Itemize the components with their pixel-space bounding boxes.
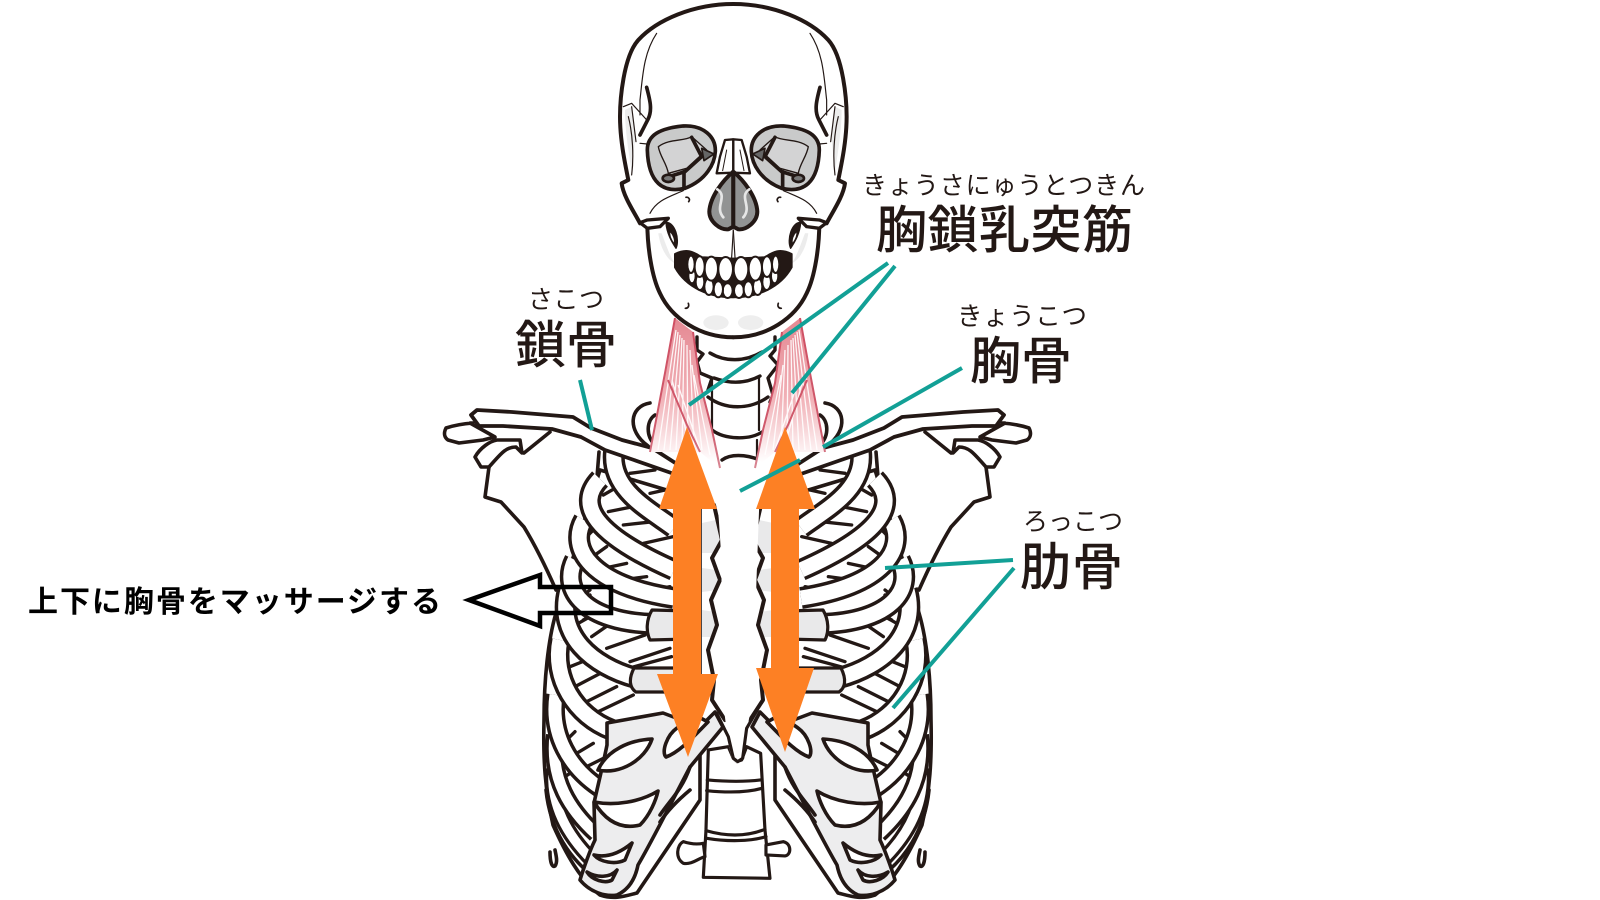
- label: sternocleidomastoid: [862, 172, 1145, 259]
- label: clavicle: [515, 286, 617, 374]
- label: sternum: 胸骨: [970, 333, 1072, 390]
- label: ribs: [1020, 508, 1123, 596]
- label: sternum: きょうこつ: [957, 303, 1087, 331]
- leader: clavicle: [580, 380, 592, 430]
- leader: ribs: [885, 560, 1014, 708]
- label: ribs: ろっこつ: [1023, 508, 1123, 536]
- torso skeleton: [445, 403, 1030, 897]
- orange double arrow: right: [756, 427, 815, 752]
- leader: sternum: [740, 368, 962, 491]
- label: sternocleidomastoid: 胸鎖乳突筋: [876, 202, 1133, 259]
- lower vertebrae: [678, 710, 790, 878]
- label: sternocleidomastoid: きょうさにゅうとつきん: [862, 172, 1145, 200]
- leader: sternocleidomastoid: [689, 263, 895, 405]
- callout arrow: [469, 575, 611, 626]
- skeleton figure: [445, 4, 1030, 897]
- orange double arrow: left: [657, 427, 718, 757]
- callout text: 上下に胸骨をマッサージする: [28, 586, 441, 619]
- label: sternum: [957, 303, 1087, 390]
- label: clavicle: さこつ: [528, 286, 604, 314]
- label: clavicle: 鎖骨: [515, 317, 617, 374]
- sternum: [716, 470, 760, 760]
- sternocleidomastoid muscles: [650, 318, 825, 468]
- label: ribs: 肋骨: [1020, 539, 1123, 596]
- leader lines: [580, 263, 1014, 708]
- neck vertebrae: [697, 337, 778, 462]
- skull: [620, 4, 847, 337]
